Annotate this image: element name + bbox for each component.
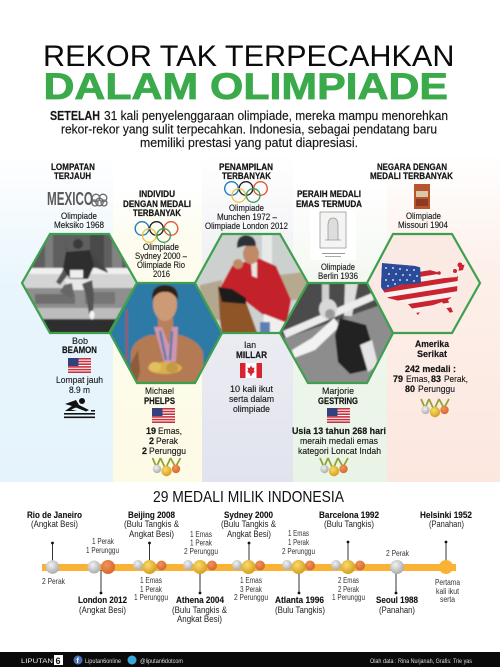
text: Olimpiade Missouri 1904: Olimpiade [406,211,441,222]
text: Olimpiade Meksiko 1968 [54,211,104,231]
heading: peraih medali emas termuda [296,189,363,209]
heading: individu dengan medali terbanyak [123,189,191,218]
heading: penampilan terbanyak: TERBANYAK [222,171,272,181]
text: USA medals: 79 [393,374,403,385]
Barcelona 1992: Barcelona 1992 [319,510,379,520]
London 2012: 1 Perak [92,537,115,546]
Athena 2004 [172,530,227,624]
Atlanta 1996: Atlanta 1996 [275,595,324,605]
text: Olimpiade Berlin 1936: Olimpiade [321,262,355,273]
text: Olimpiade Missouri 1904: Missouri 1904 [398,220,449,231]
icon: medals [320,458,348,476]
twitter handle [128,656,183,665]
text: Olimpiade Meksiko 1968: Meksiko 1968 [54,220,104,231]
text: Marjorie Gestring: GESTRING [318,396,358,407]
Helsinki 1952: kali ikut [436,587,460,596]
text: Amerika Serikat: Serikat [417,349,448,360]
icon: US flag [68,358,91,373]
intro text: rekor-rekor yang sulit terpecahkan. Indonesia, sebagai pendatang baru [61,122,437,136]
heading: lompatan terjauh [51,162,95,181]
text: USA medals [393,364,468,395]
Helsinki 1952: Pertama [435,578,460,587]
Athena 2004: (Bulu Tangkis & [172,605,227,615]
text: Marjorie Gestring: Marjorie [322,386,354,397]
Seoul 1988 [376,549,418,615]
Atlanta 1996: 1 Perak [288,538,310,547]
icon: olympic rings [135,222,178,242]
Seoul 1988: 2 Perak [386,549,410,558]
text: Phelps medals: 2 [149,436,154,447]
facebook handle: f [76,658,80,665]
text: Millar record [229,384,274,415]
icon: Berlin 1936 poster [310,210,356,260]
text: Olimpiade Berlin 1936 [318,262,358,282]
icon: long jump pictogram [64,398,95,418]
Athena 2004: Angkat Besi) [177,614,222,624]
intro text: SETELAH [50,109,100,123]
Sydney 2000: 2 Perunggu [234,593,268,602]
text: Bob Beamon: BEAMON [62,345,97,356]
text: Phelps medals: Perunggu [149,446,186,457]
title: DALAM OLIMPIADE [44,67,448,107]
Sydney 2000 [221,510,276,602]
text: Olimpiade Munchen-London: Olimpiade London 2012 [205,221,288,232]
text: Gestring record: Usia 13 tahun 268 hari [292,426,386,437]
map hexagon: United States flag map [367,234,480,333]
text: Olimpiade Sydney-Rio: Olimpiade [143,242,179,253]
Beijing 2008: Angkat Besi) [129,529,174,539]
Barcelona 1992: 2 Perak [338,585,360,594]
icon: Mexico 1968 logo: MEXICO [47,189,93,209]
credits: Olah data : Rina Nurjanah, Grafis: Trie yas [370,658,472,665]
text: long jump record: Lompat jauh [56,375,103,386]
text: long jump record [56,375,103,396]
text: Olimpiade Berlin 1936: Berlin 1936 [318,271,358,282]
Sydney 2000: Angkat Besi) [227,529,271,539]
title: REKOR TAK TERPECAHKAN [43,40,454,73]
Athena 2004: 2 Perunggu [184,547,218,556]
text: Marjorie Gestring [318,386,358,407]
Sydney 2000: (Bulu Tangkis & [221,519,276,529]
Liputan6 logo: 6 [56,656,61,666]
Athena 2004: 1 Emas [190,530,212,539]
text: Amerika Serikat: Amerika [415,339,450,350]
text: Phelps medals: Perak [156,436,178,447]
Helsinki 1952 [420,510,472,604]
heading: penampilan terbanyak [219,162,273,181]
facebook handle [74,656,121,665]
heading: individu dengan medali terbanyak: DENGAN MEDALI [123,199,191,209]
icon: Canada flag [240,363,262,378]
Beijing 2008: 1 Perunggu [134,593,168,602]
London 2012 [78,537,127,615]
Barcelona 1992 [319,510,379,602]
text: Michael Phelps: PHELPS [144,396,175,407]
intro text: memiliki prestasi yang patut diapresiasi. [140,136,358,150]
text: Amerika Serikat [415,339,450,360]
panel: coloured columns [0,155,500,482]
Rio de Janeiro 2016 [27,510,82,586]
text: Gestring record [292,426,386,457]
Beijing 2008: 1 Emas [140,576,162,585]
text: Olimpiade Munchen-London: Olimpiade [229,203,264,214]
heading: penampilan terbanyak: PENAMPILAN [219,162,273,172]
heading: negara dengan medali terbanyak: NEGARA DENGAN [377,162,447,172]
Atlanta 1996 [275,529,325,615]
Beijing 2008: Beijing 2008 [128,510,175,520]
Beijing 2008 [124,510,179,602]
Atlanta 1996: (Bulu Tangkis) [275,605,325,615]
text: Phelps medals: 2 [142,446,147,457]
text: USA medals: 80 [405,384,415,395]
photo hexagon: Ian Millar [193,232,310,335]
icon: US flag [327,408,350,423]
text: Phelps medals [142,426,186,457]
intro text: 31 kali penyelenggaraan olimpiade, mereka mampu menorehkan [104,109,448,123]
Beijing 2008: (Bulu Tangkis & [124,519,179,529]
heading: lompatan terjauh: TERJAUH [54,171,91,181]
text: USA medals: Perunggu [418,384,455,395]
icon: medals [152,458,180,476]
Liputan6 logo: LIPUTAN [21,658,53,665]
heading: individu dengan medali terbanyak: TERBANYAK [133,208,182,218]
text: Bob Beamon: Bob [72,336,88,347]
heading: peraih medali emas termuda: EMAS TERMUDA [296,199,363,209]
Barcelona 1992: 1 Perunggu [332,593,365,602]
text: Olimpiade Sydney-Rio: Olimpiade Rio [137,260,185,271]
heading: lompatan terjauh: LOMPATAN [51,162,95,172]
Seoul 1988: (Panahan) [379,605,415,615]
text: Ian Millar: Ian [244,340,256,351]
Sydney 2000: 3 Perak [240,585,263,594]
text: Olimpiade Missouri 1904 [398,211,449,231]
Athena 2004: 1 Perak [190,538,213,548]
heading: negara dengan medali terbanyak: MEDALI TERBANYAK [370,171,454,181]
Barcelona 1992: (Bulu Tangkis) [324,519,374,529]
text: Michael Phelps: Michael [145,386,174,397]
icon: Missouri 1904 poster [414,184,430,209]
text: Ian Millar [236,340,267,361]
text: Gestring record: kategori Loncat Indah [298,446,381,457]
text: Olimpiade Sydney-Rio: 2016 [153,269,170,280]
London 2012: London 2012 [78,595,127,605]
Atlanta 1996: 1 Emas [288,529,309,538]
Sydney 2000: 1 Emas [240,576,262,585]
twitter handle: @liputan6dotcom [140,658,183,665]
London 2012: 1 Perunggu [86,546,119,555]
Atlanta 1996: 2 Perunggu [282,547,315,556]
title [43,40,454,107]
text: Millar record: serta dalam [229,394,274,405]
Beijing 2008: 1 Perak [140,585,163,594]
text: Gestring record: meraih medali emas [300,436,378,447]
text: Phelps medals: Emas, [158,426,182,437]
icon: US flag [152,408,175,423]
photo hexagon: Marjorie Gestring [278,281,395,385]
text: Bob Beamon [62,336,97,356]
text: USA medals: Perak, [444,374,468,385]
text: long jump record: 8.9 m [69,385,90,396]
heading: individu dengan medali terbanyak: INDIVIDU [139,189,175,199]
text: Phelps medals: 19 [146,426,156,437]
facebook handle: Liputan6online [85,658,121,665]
Seoul 1988: Seoul 1988 [376,595,418,605]
timeline bar [42,564,456,571]
text: USA medals: Emas, [406,374,430,385]
Barcelona 1992: 2 Emas [338,576,359,585]
icon: medals [421,399,449,417]
Rio de Janeiro 2016: 2 Perak [42,577,66,586]
photo hexagon: Michael Phelps [108,281,224,385]
text: USA medals: 83 [431,374,441,385]
heading: peraih medali emas termuda: PERAIH MEDALI [297,189,361,199]
Helsinki 1952: Helsinki 1952 [420,510,472,520]
Helsinki 1952: (Panahan) [429,519,464,529]
intro text [50,109,448,150]
text: Millar record: olimpiade [233,404,270,415]
Helsinki 1952: serta [440,595,455,604]
footer [0,652,500,667]
text: Olimpiade Sydney-Rio [135,242,188,280]
London 2012: (Angkat Besi) [79,605,126,615]
Liputan6 logo [21,655,63,666]
Sydney 2000: Sydney 2000 [224,510,273,520]
Athena 2004: Athena 2004 [176,595,224,605]
heading: 29 medali: 29 MEDALI MILIK INDONESIA [153,489,345,506]
text: Michael Phelps [144,386,175,407]
text: Olimpiade Munchen-London: Munchen 1972 – [217,212,278,223]
Rio de Janeiro 2016: Rio de Janeiro [27,510,82,520]
text: USA medals: 242 medali : [405,364,456,375]
photo hexagon: Bob Beamon [20,232,140,335]
heading: negara dengan medali terbanyak [370,162,454,181]
Rio de Janeiro 2016: (Angkat Besi) [31,519,78,529]
text: Olimpiade Munchen-London [205,203,288,232]
text: Ian Millar: MILLAR [236,350,267,361]
timeline [27,510,472,624]
text: Millar record: 10 kali ikut [230,384,273,395]
icon: olympic rings [225,182,267,202]
text: Olimpiade Sydney-Rio: Sydney 2000 – [135,251,188,262]
text: Olimpiade Meksiko 1968: Olimpiade [61,211,97,222]
